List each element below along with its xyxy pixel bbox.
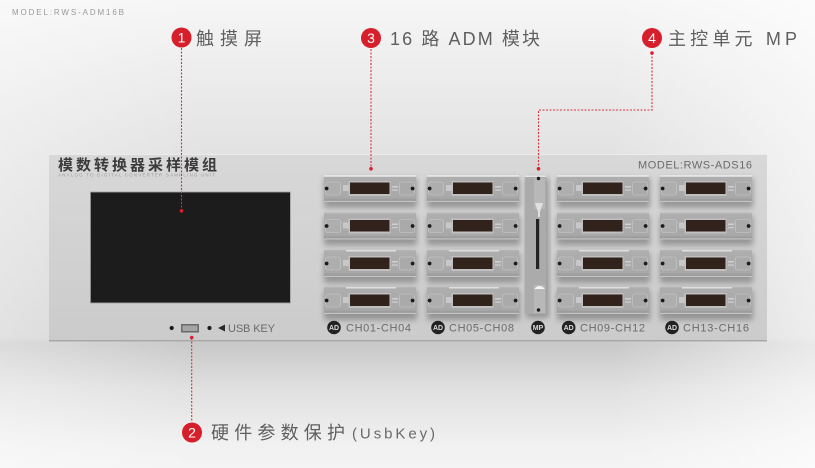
touch screen xyxy=(90,192,291,303)
channel label CH05-CH08: AD xyxy=(433,325,443,332)
channel label CH13-CH16: AD xyxy=(667,325,677,332)
callout 3: 16-channel ADM modules: 16 路 ADM 模块 xyxy=(390,29,540,49)
callout 1: touch screen: 触摸屏 xyxy=(196,29,262,49)
callout 1: touch screen xyxy=(172,28,262,213)
ADM module group CH01-CH04 xyxy=(324,175,417,320)
callout 3: 16-channel ADM modules: 3 xyxy=(367,30,375,46)
panel body xyxy=(49,154,767,342)
callout 2: hardware parameter protection: 硬件参数保护 xyxy=(211,423,345,443)
callout 4: main control unit MP xyxy=(537,28,797,171)
channel label CH05-CH08: CH05-CH08 xyxy=(449,322,514,334)
channel label CH01-CH04: AD xyxy=(329,325,339,332)
panel title: 模数转换器采样模组 xyxy=(58,156,217,174)
channel label CH09-CH12 xyxy=(562,321,645,334)
panel subtitle: ANALOG TO DIGITAL CONVERTER SAMPLING UNIT xyxy=(58,172,215,178)
USB key port xyxy=(170,323,276,335)
MP control module xyxy=(525,176,549,318)
callout 2: hardware parameter protection xyxy=(182,336,435,443)
channel label CH01-CH04 xyxy=(327,321,411,334)
panel model label: MODEL:RWS-ADS16 xyxy=(638,160,752,172)
channel label CH13-CH16 xyxy=(665,321,749,334)
callout 3: 16-channel ADM modules xyxy=(361,28,540,171)
label MP xyxy=(531,321,545,334)
channel label CH01-CH04: CH01-CH04 xyxy=(346,322,411,334)
channel label CH09-CH12: AD xyxy=(564,325,574,332)
label MP: MP xyxy=(533,325,544,332)
callout 4: main control unit MP: 4 xyxy=(648,30,656,46)
model code label: MODEL:RWS-ADM16B xyxy=(12,8,124,17)
ADM module group CH09-CH12 xyxy=(557,175,650,320)
channel label CH13-CH16: CH13-CH16 xyxy=(683,322,749,334)
channel label CH05-CH08 xyxy=(431,321,514,334)
USB key port: USB KEY xyxy=(228,323,276,335)
device panel xyxy=(49,154,767,342)
callout 4: main control unit MP: 主控单元 MP xyxy=(668,29,797,49)
ADM module group CH05-CH08 xyxy=(427,175,520,320)
ADM module group CH13-CH16 xyxy=(660,175,753,320)
callout 2: hardware parameter protection: 2 xyxy=(188,424,196,440)
callout 2: hardware parameter protection: (UsbKey) xyxy=(352,426,435,442)
callout 1: touch screen: 1 xyxy=(178,30,186,46)
channel label CH09-CH12: CH09-CH12 xyxy=(580,322,645,334)
